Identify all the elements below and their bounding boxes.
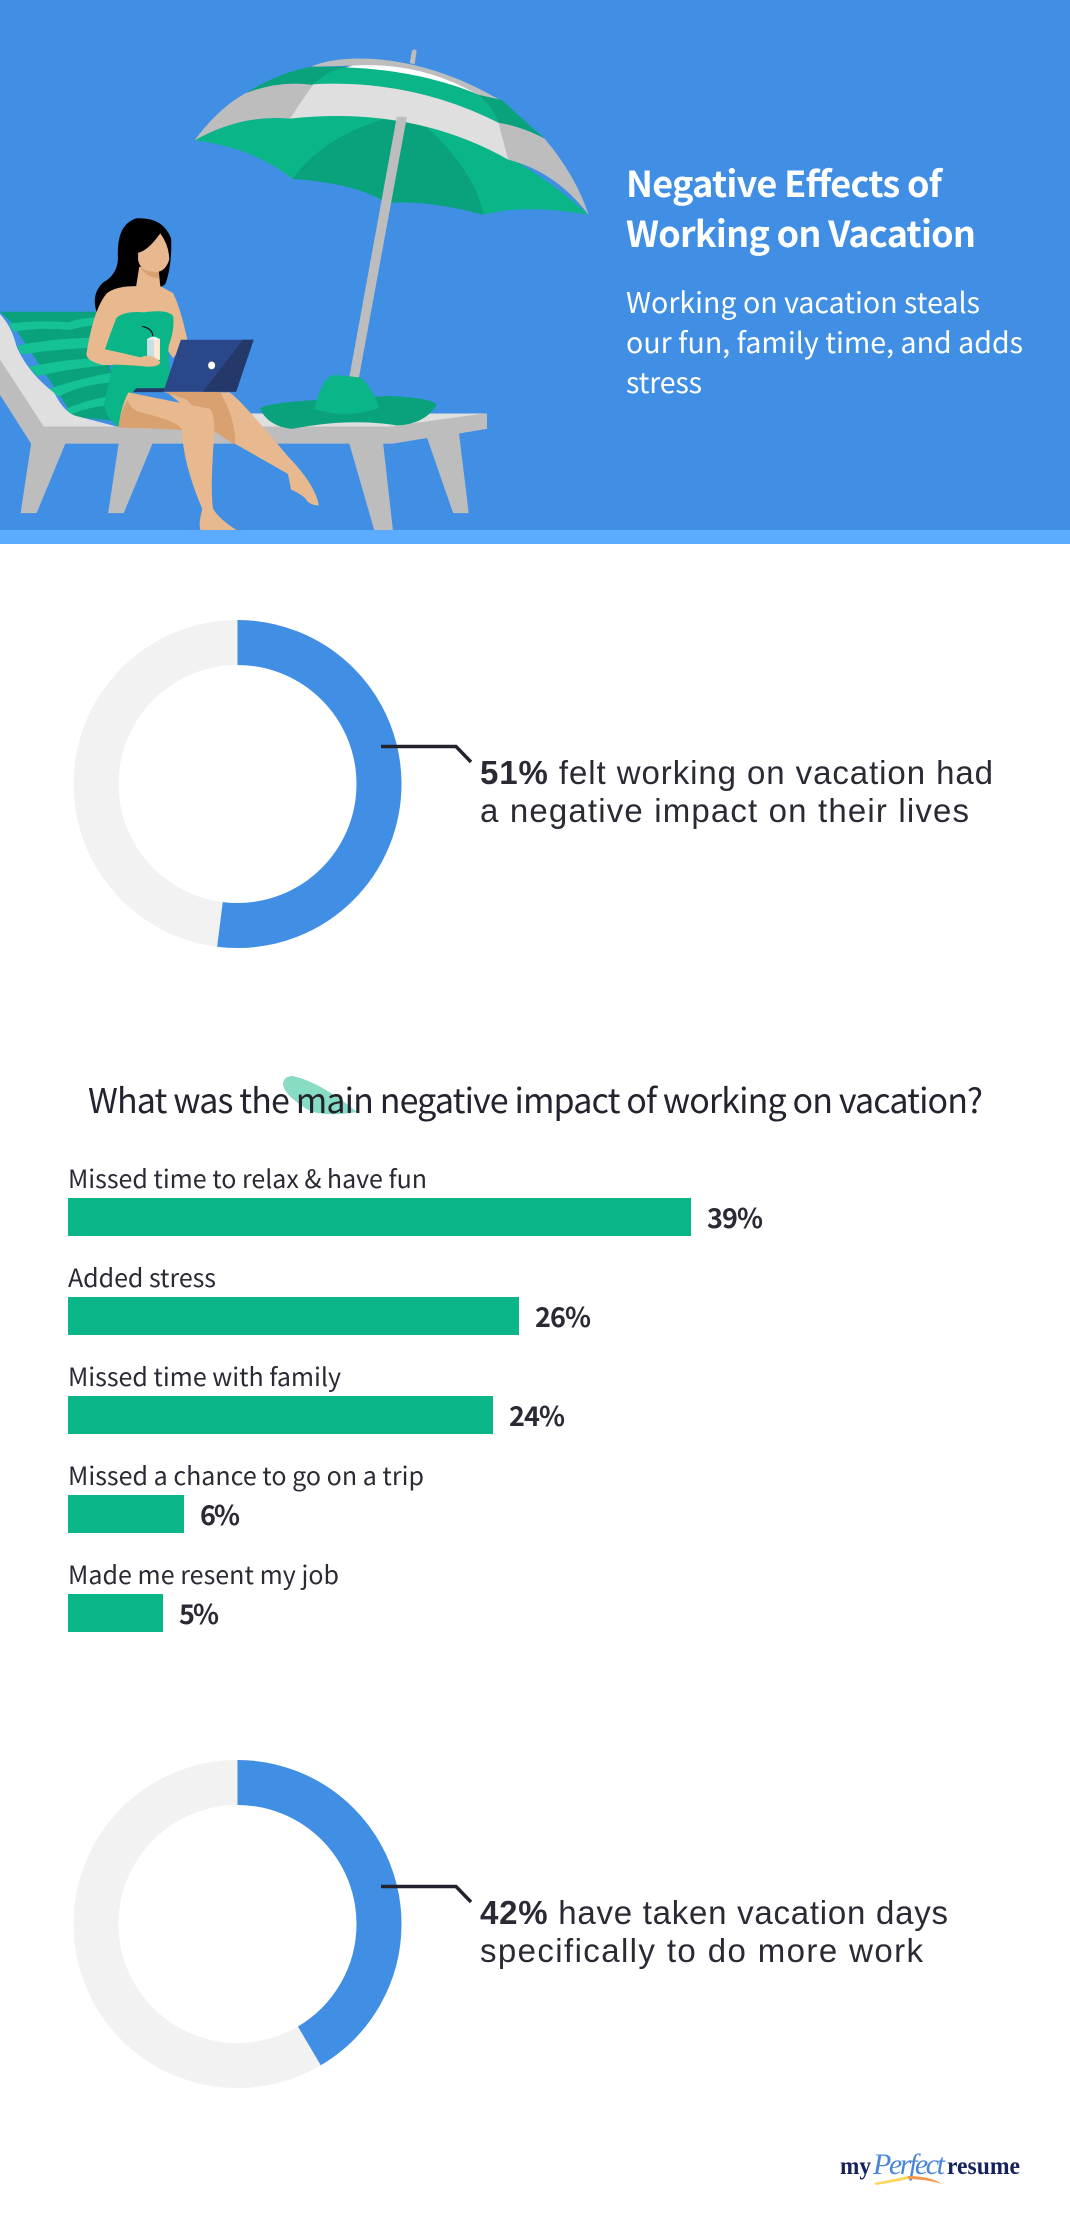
icon: umbrella canopy: [195, 59, 589, 215]
bar: missed a chance to go on a trip: Missed a chance to go on a trip: [68, 1457, 424, 1493]
title: [626, 156, 976, 258]
callout: 42% text: [480, 1894, 948, 1969]
icon: sun hat: [260, 375, 436, 429]
illustration: woman on lounge chair under umbrella: [0, 49, 589, 530]
subtitle: stress: [626, 361, 702, 402]
bar: missed time with family: Missed time with family: [68, 1358, 341, 1394]
bar: added stress: [68, 1259, 591, 1335]
callout: 51% text: 51% felt working on vacation had: [480, 754, 993, 791]
icon: laptop: [133, 340, 254, 392]
icon: leaf accent: [283, 1076, 357, 1114]
callout: 51% text: a negative impact on their lives: [480, 792, 969, 829]
subtitle: our fun, family time, and adds: [626, 321, 1023, 362]
bar: added stress: 26%: [535, 1296, 591, 1335]
callout: 42% text: specifically to do more work: [480, 1932, 924, 1969]
bar: missed time to relax: Missed time to relax & have fun: [68, 1160, 427, 1196]
callout: 42% text: 42% have taken vacation days: [480, 1894, 948, 1931]
title: Negative Effects of: [626, 156, 944, 208]
icon: woman: [86, 218, 319, 530]
bar: made me resent my job: [68, 1556, 339, 1632]
donut chart: 51%: [96, 642, 379, 926]
bar: missed time with family: [68, 1358, 565, 1434]
bar: made me resent my job: Made me resent my job: [68, 1556, 339, 1592]
bar chart: [68, 1160, 763, 1632]
title: Working on Vacation: [626, 206, 976, 258]
icon: lounge chair: [0, 314, 487, 530]
bar: missed time to relax: 39%: [707, 1197, 763, 1236]
bar: added stress: Added stress: [68, 1259, 216, 1295]
bar: made me resent my job: 5%: [179, 1593, 219, 1632]
logo: myPerfectResume: resume: [947, 2153, 1020, 2180]
subtitle: Working on vacation steals: [626, 281, 980, 322]
bar: missed time with family: 24%: [509, 1395, 565, 1434]
subtitle: [626, 281, 1023, 402]
bar: missed time to relax: [68, 1160, 763, 1236]
chart heading: What was the main negative impact of working on vacation?: [88, 1074, 983, 1123]
callout leader line: [381, 746, 471, 762]
callout: 51% text: [480, 754, 993, 829]
icon: umbrella pole: [349, 49, 417, 379]
icon: beach towel: [0, 312, 121, 421]
bar: missed a chance to go on a trip: [68, 1457, 424, 1533]
hero banner: [0, 0, 1070, 544]
donut chart: 42%: [96, 1782, 379, 2066]
logo: myPerfectResume: [840, 2148, 1020, 2185]
logo: myPerfectResume: my: [840, 2153, 871, 2180]
bar: missed a chance to go on a trip: 6%: [200, 1494, 240, 1533]
callout leader line: [381, 1886, 471, 1902]
logo: myPerfectResume: Perfect: [872, 2148, 946, 2181]
